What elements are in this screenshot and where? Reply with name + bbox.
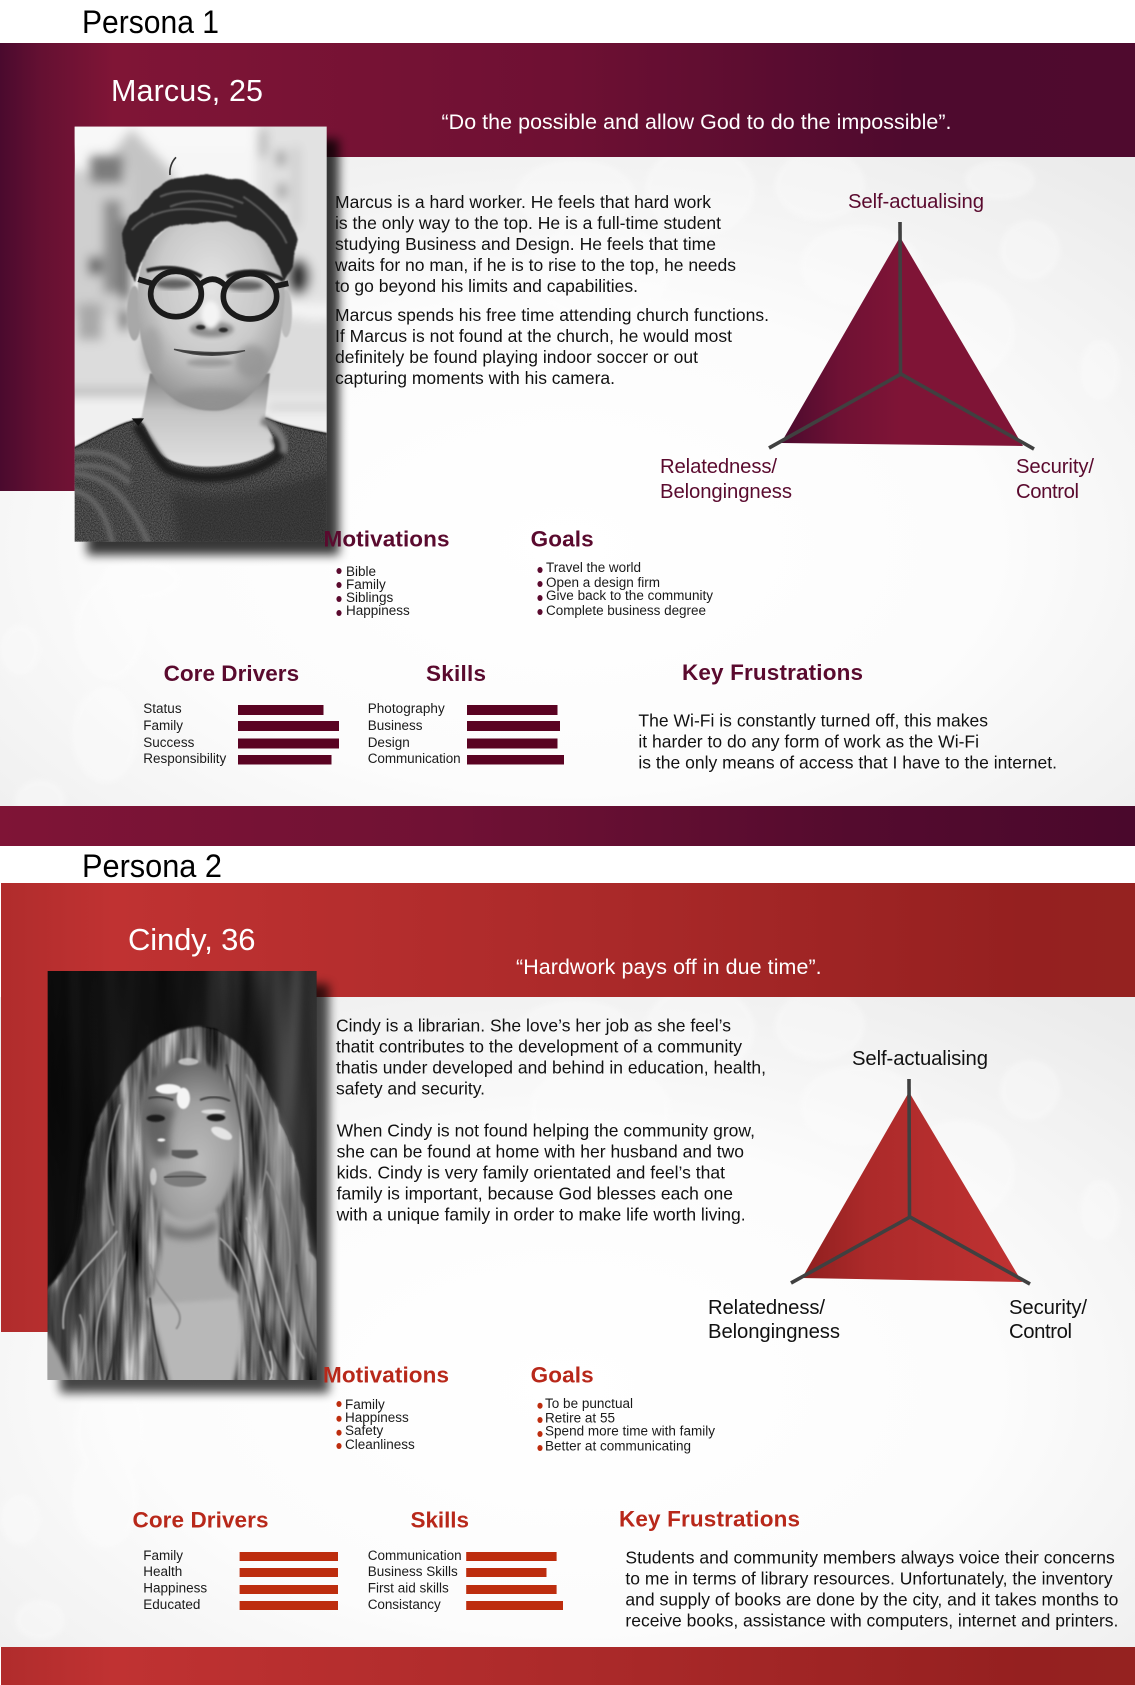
goals: Cindy: Goals: [531, 1363, 594, 1388]
motivations: Cindy: Motivations: [323, 1363, 449, 1388]
triangle chart: Cindy: Self-actualising: [852, 1048, 988, 1070]
motivations: Marcus: Happiness: [346, 603, 410, 618]
goals: Marcus: Complete business degree: [546, 603, 706, 618]
bio: Cindy: thatis under developed and behind in education, health,: [336, 1058, 766, 1078]
skills: Cindy: First aid skills: [368, 1581, 449, 1596]
collar: [137, 425, 280, 477]
triangle chart: Cindy: [708, 1048, 1087, 1343]
persona 1 left column: [0, 157, 75, 491]
triangle chart: Marcus: Control: [1016, 481, 1079, 503]
quote: Marcus: “Do the possible and allow God to do the impossible”.: [442, 110, 952, 134]
core drivers: Cindy: Family: [143, 1548, 183, 1563]
triangle chart: Cindy: Security/: [1009, 1297, 1087, 1319]
key frustrations: Cindy: to me in terms of library resources. Unfortunately, the inventory: [625, 1568, 1113, 1588]
name: Cindy: Cindy, 36: [128, 922, 256, 957]
bio: Cindy: kids. Cindy is very family orientated and feel’s that: [337, 1163, 725, 1183]
core drivers: Marcus: Family: [143, 718, 183, 733]
glasses: [138, 271, 288, 319]
persona 2 footer band: [1, 1647, 1135, 1685]
goals: Cindy: Better at communicating: [545, 1439, 691, 1454]
shirt: [70, 418, 333, 548]
goals: Cindy: Retire at 55: [545, 1411, 615, 1426]
goals: Cindy: Spend more time with family: [545, 1424, 715, 1439]
key frustrations: Marcus: Key Frustrations: [682, 660, 863, 685]
name: Marcus: Marcus, 25: [111, 74, 263, 108]
triangle chart: Marcus: Relatedness/: [660, 456, 777, 478]
persona 1 footer band: [0, 806, 1135, 846]
core drivers: Cindy: Core Drivers: [132, 1508, 268, 1533]
neck: [141, 373, 275, 467]
motivations: Marcus: [324, 527, 450, 618]
persona 2 header band: [1, 883, 1135, 997]
key frustrations: Cindy: and supply of books are done by the city, and it takes months to: [625, 1590, 1118, 1610]
key frustrations: Cindy: receive books, assistance with computers, internet and printers.: [625, 1611, 1118, 1631]
skills: Cindy: Consistancy: [368, 1597, 441, 1612]
key frustrations: Marcus: is the only means of access that I have to the internet.: [638, 753, 1057, 773]
skills: Marcus: Skills: [426, 661, 486, 686]
bio: Marcus: capturing moments with his camera.: [335, 368, 615, 388]
goals: Cindy: [531, 1363, 715, 1454]
hair: [123, 175, 297, 282]
motivations: Marcus: Motivations: [324, 527, 450, 552]
face: [141, 1060, 239, 1220]
motivations: Marcus: Family: [346, 577, 386, 592]
bio: Cindy: When Cindy is not found helping the community grow,: [337, 1121, 755, 1141]
ears: [127, 286, 142, 341]
bio: Cindy: safety and security.: [336, 1078, 485, 1098]
triangle chart: Marcus: [660, 191, 1094, 503]
skills: Marcus: Design: [368, 735, 410, 750]
key frustrations: Marcus: [638, 660, 1057, 773]
strands: [63, 1065, 317, 1380]
key frustrations: Cindy: [619, 1507, 1118, 1631]
skills: Marcus: Communication: [368, 751, 461, 766]
brows and eyes: [148, 1097, 230, 1101]
motivations: Cindy: Happiness: [345, 1410, 409, 1425]
skills: Cindy: [368, 1508, 563, 1612]
bio: Marcus: If Marcus is not found at the church, he would most: [335, 326, 732, 346]
skills: Cindy: Skills: [410, 1508, 469, 1533]
triangle chart: Marcus: Belongingness: [660, 481, 792, 503]
skills: Cindy: Communication: [368, 1548, 462, 1563]
bio: Cindy: [336, 1016, 766, 1225]
bio: Marcus: Marcus spends his free time attending church functions.: [335, 305, 769, 325]
lips: [164, 1171, 206, 1187]
photo shadow: Marcus: [87, 139, 339, 555]
bio: Cindy: with a unique family in order to make life worth living.: [336, 1205, 746, 1225]
goals: Marcus: Travel the world: [546, 560, 641, 575]
goals: Marcus: Give back to the community: [546, 588, 713, 603]
bio: Marcus: is the only way to the top. He is a full-time student: [335, 213, 721, 233]
light patches: [150, 1058, 234, 1185]
bio: Marcus: Marcus is a hard worker. He feels that hard work: [335, 192, 711, 212]
goals: Marcus: Goals: [531, 527, 594, 552]
core drivers: Marcus: Success: [143, 735, 195, 750]
core drivers: Cindy: Educated: [143, 1597, 200, 1612]
triangle chart: Cindy: Relatedness/: [708, 1297, 825, 1319]
goals: Cindy: To be punctual: [545, 1396, 633, 1411]
core drivers: Marcus: Status: [143, 701, 182, 716]
skills: Marcus: Business: [368, 718, 423, 733]
triangle chart: Marcus: Self-actualising: [848, 191, 984, 213]
core drivers: Marcus: [143, 661, 339, 766]
triangle chart: Cindy: Belongingness: [708, 1321, 840, 1343]
nose: [172, 1150, 198, 1159]
photo: Cindy portrait: [43, 971, 320, 1385]
goals: Marcus: Open a design firm: [546, 575, 660, 590]
bio: Marcus: [334, 192, 769, 388]
key frustrations: Cindy: Key Frustrations: [619, 1507, 800, 1532]
bio: Marcus: studying Business and Design. He feels that time: [335, 234, 716, 254]
key frustrations: Marcus: The Wi-Fi is constantly turned off, this makes: [638, 711, 988, 731]
skills: Marcus: Photography: [368, 701, 445, 716]
hair mass: [43, 1027, 320, 1385]
triangle chart: Cindy: Control: [1009, 1321, 1072, 1343]
chest: [147, 1292, 241, 1385]
core drivers: Cindy: [132, 1508, 338, 1612]
core drivers: Marcus: Core Drivers: [164, 661, 299, 686]
bio: Cindy: thatit contributes to the development of a community: [336, 1037, 742, 1057]
goals: Marcus: [531, 527, 713, 618]
core drivers: Cindy: Happiness: [143, 1581, 207, 1596]
persona 2 label: Persona 2: [82, 848, 222, 884]
key frustrations: Marcus: it harder to do any form of work as the Wi-Fi: [638, 732, 979, 752]
bio: Cindy: Cindy is a librarian. She love’s her job as she feel’s: [336, 1016, 731, 1036]
eyes: [156, 279, 192, 289]
nose: [190, 321, 234, 337]
bio: Cindy: she can be found at home with her husband and two: [337, 1142, 744, 1162]
face: [137, 217, 285, 411]
motivations: Cindy: Family: [345, 1397, 385, 1412]
bio: Cindy: family is important, because God blesses each one: [337, 1184, 733, 1204]
photo shadow: Cindy: [60, 984, 329, 1393]
skills: Cindy: Business Skills: [368, 1564, 458, 1579]
triangle chart: Marcus: Security/: [1016, 456, 1094, 478]
motivations: Marcus: Siblings: [346, 590, 394, 605]
core drivers: Cindy: Health: [143, 1564, 182, 1579]
neck: [147, 1205, 240, 1305]
motivations: Cindy: Cleanliness: [345, 1437, 415, 1452]
motivations: Marcus: Bible: [346, 564, 376, 579]
skills: Marcus: [368, 661, 564, 766]
persona 1 background panel: [0, 145, 1135, 820]
bio: Marcus: waits for no man, if he is to rise to the top, he needs: [334, 255, 736, 275]
persona 2 left column: [1, 997, 48, 1332]
motivations: Cindy: [323, 1363, 449, 1452]
photo: Marcus portrait: [74, 126, 327, 542]
key frustrations: Cindy: Students and community members always voice their concerns: [625, 1547, 1115, 1567]
motivations: Cindy: Safety: [345, 1423, 384, 1438]
bio: Marcus: to go beyond his limits and capabilities.: [335, 276, 638, 296]
mouth: [174, 349, 245, 355]
quote: Cindy: “Hardwork pays off in due time”.: [516, 955, 822, 979]
core drivers: Marcus: Responsibility: [143, 751, 227, 766]
persona 1 header band: [0, 43, 1135, 157]
persona 1 label: Persona 1: [82, 4, 219, 40]
bio: Marcus: definitely be found playing indoor soccer or out: [335, 347, 698, 367]
persona 2 background panel: [0, 985, 1135, 1647]
